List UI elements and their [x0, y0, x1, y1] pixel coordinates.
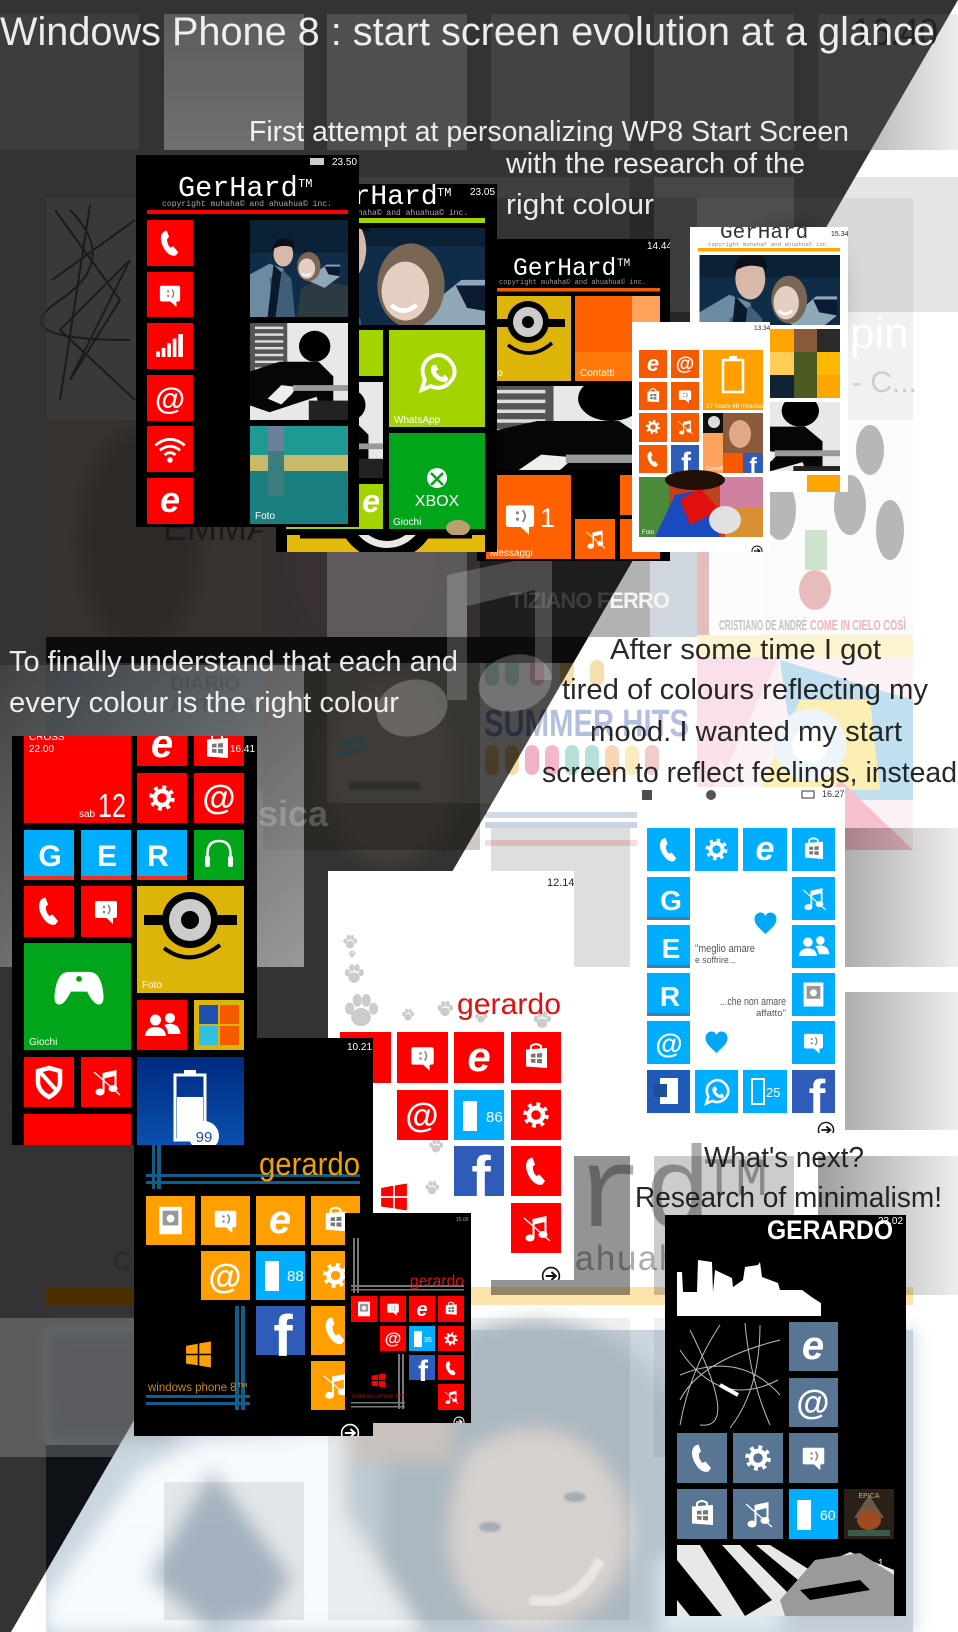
red and blue tiles: f: [471, 1145, 491, 1210]
caption: feelings: screen to reflect feelings, instead: [542, 757, 957, 789]
xbox tile: [389, 433, 485, 536]
background: faded tile content, dark side: [46, 198, 843, 1572]
GER tiles: G: [38, 840, 62, 873]
tile column: [147, 220, 193, 524]
blue tiles: R: [660, 981, 680, 1012]
slate tiles: e: [802, 1324, 824, 1368]
red tiles: e: [151, 722, 173, 766]
phone: lime and green start screen: 23.05: [470, 187, 495, 198]
guitar photo: [770, 402, 840, 471]
wordmark: GerHard: [513, 256, 616, 283]
phone: red start screen with GerHard header: 23.50: [332, 157, 357, 168]
games tile: [24, 943, 131, 1050]
orange tiles: f: [681, 447, 692, 480]
piano photo: [677, 1545, 894, 1616]
caption: every colour: every colour is the right colour: [9, 687, 399, 719]
wordmark: [708, 222, 849, 248]
caption: what's next: [635, 1142, 942, 1214]
orange and blue tiles: 88: [287, 1268, 304, 1285]
caption: feelings: mood. I wanted my start: [590, 716, 902, 748]
wordmark: GerHard: [178, 172, 298, 205]
quote: e soffrire...: [695, 955, 736, 965]
GER tiles: R: [147, 840, 169, 873]
blue tiles: 25: [766, 1085, 780, 1100]
caption: what's next: What's next?: [704, 1142, 864, 1174]
wordmark: [162, 172, 332, 209]
red and blue tiles: f: [418, 1355, 429, 1388]
phone: minimalist start screen: [665, 1215, 906, 1616]
wordmark: gerardo: [410, 1273, 464, 1290]
wordmark: copyright muhaha© and ahuahua© inc.: [499, 278, 646, 287]
minion tile: Foto: [142, 980, 162, 991]
phone: white start screen with blue tiles: [637, 787, 845, 1133]
calendar tile: 12: [98, 787, 126, 824]
album tile: [844, 1489, 894, 1539]
skyline: [677, 1260, 821, 1316]
minion tile: [486, 296, 571, 381]
orange and blue tiles: [146, 1196, 360, 1410]
phone: black start screen with orange tiles: windows phone 8™: [147, 1380, 248, 1394]
battery tile: 17 hours 48 minutes: [706, 403, 763, 410]
foto tile: Foto: [255, 511, 275, 522]
tiles: Messaggi: [490, 548, 533, 559]
caption: what's next: Research of minimalism!: [635, 1182, 942, 1214]
wordmark: TM: [617, 258, 630, 270]
calendar tile: CROSS: [29, 732, 65, 743]
blue line ornaments: [146, 1140, 360, 1410]
wordmark: gerardo: [259, 1146, 360, 1182]
quote: "meglio amare: [695, 943, 755, 955]
games tile: Giochi: [29, 1037, 57, 1048]
quote: ...che non amare: [720, 996, 786, 1008]
wordmark: copyright muhaha© and ahuahua© inc.: [708, 241, 830, 248]
phone: small white start screen with orange tiles: [632, 322, 771, 552]
calendar tile: sab: [79, 809, 96, 820]
grey line ornaments: [351, 1238, 464, 1409]
wordmark: copyright muhaha© and ahuahua© inc.: [300, 209, 468, 218]
wordmark: [499, 256, 646, 287]
blue tiles: @: [655, 1028, 683, 1059]
orange and blue tiles: f: [273, 1304, 293, 1369]
red and blue tiles: @: [385, 1329, 401, 1348]
slate tiles: 60: [820, 1507, 836, 1523]
faint clock behind title: 16.40: [852, 12, 938, 54]
GER tiles: [24, 830, 244, 880]
light trails photo: [677, 1323, 782, 1429]
guitar photo: [497, 386, 632, 470]
tiles: 1: [540, 503, 555, 533]
red and blue tiles: [340, 1032, 561, 1253]
phone: black start screen with orange tiles: [134, 1038, 373, 1436]
windows logo: [381, 1184, 407, 1210]
battery tile: [703, 350, 763, 410]
caption: first attempt: right colour: [506, 189, 654, 221]
caption: every colour: [9, 646, 458, 719]
minion tile: [137, 886, 244, 993]
red and blue tiles: [351, 1296, 464, 1410]
caption: first attempt: with the research of the: [505, 148, 805, 180]
slate tiles: [677, 1322, 838, 1539]
red and blue tiles: 35: [424, 1337, 432, 1344]
GER tiles: E: [97, 840, 117, 873]
quote: [695, 943, 786, 1018]
orange and blue tiles: @: [208, 1258, 242, 1296]
phone: tiny black start screen with red tiles: [345, 1213, 471, 1423]
blue tiles: f: [809, 1070, 826, 1126]
phone: multicolour start screen: [12, 722, 257, 1146]
windows logo: [372, 1373, 385, 1388]
battery tile: 99: [196, 1129, 212, 1146]
whatsapp tile: WhatsApp: [394, 415, 441, 426]
wordmark: gerardo: [457, 988, 561, 1021]
title: Windows Phone 8 : start screen evolution at a glance: [0, 10, 935, 54]
phone: minimalist start screen: 23.02: [878, 1216, 903, 1227]
phone: lime and green start screen: e: [362, 483, 380, 519]
hearts: [706, 912, 776, 1053]
orange tiles: @: [676, 354, 694, 375]
wordmark: copyright muhaha© and ahuahua© inc.: [162, 200, 332, 209]
caption: feelings: After some time I got: [610, 634, 881, 666]
contacts tile: Contatti: [580, 368, 614, 379]
battery tile: [137, 1057, 244, 1151]
foto tile: [250, 426, 348, 524]
phone: white start screen with red tiles: 12.14: [547, 877, 575, 889]
phone: red start screen with GerHard header: [136, 155, 359, 527]
blue tiles: E: [662, 933, 680, 964]
orange and blue tiles: e: [269, 1198, 291, 1242]
tile column: @: [155, 381, 185, 416]
wordmark: [300, 182, 468, 218]
caption: every colour: To finally understand that each and: [9, 646, 458, 678]
phone: multicolour start screen: 16.41: [230, 744, 255, 755]
red tiles: @: [202, 779, 236, 817]
red and blue tiles: e: [416, 1299, 428, 1321]
phone: small white start screen with orange tiles: 13.34: [754, 325, 771, 332]
whatsapp tile: [389, 330, 485, 427]
mario photo tile: [639, 470, 763, 537]
contacts mosaic: Contatti: [706, 466, 723, 472]
windows logo: [186, 1342, 211, 1367]
wordmark: GerHard: [320, 182, 438, 213]
phone: tiny black start screen with red tiles: windows phone 8™: [351, 1393, 405, 1400]
tile column: e: [160, 479, 180, 520]
album tile: EPICA: [858, 1493, 880, 1500]
status bar: 16.27: [822, 789, 845, 799]
contacts mosaic: [703, 413, 763, 478]
red and blue tiles: 86: [486, 1109, 503, 1126]
wordmark: GERARDO: [767, 1215, 893, 1245]
calendar tile: [24, 732, 131, 824]
wordmark: 15.34: [831, 231, 849, 238]
tiles: [486, 475, 660, 559]
phone: orange start screen: [477, 239, 672, 561]
minion tile: oto: [489, 368, 503, 379]
status bar: [642, 789, 845, 800]
guitar photo: [250, 323, 348, 420]
phone: black start screen with orange tiles: 10.21: [347, 1042, 372, 1053]
quote: affatto": [756, 1008, 786, 1018]
caption: first attempt: First attempt at personalizing WP8 Start Screen: [249, 116, 849, 148]
wordmark: GerHard: [720, 222, 808, 245]
blue tiles: e: [756, 830, 774, 868]
paw prints: [343, 935, 551, 1233]
caption: first attempt: [249, 116, 849, 221]
background tiles on dark side: sica: [258, 793, 329, 834]
caption: feelings: [542, 634, 957, 789]
contacts mosaic: [760, 329, 840, 398]
red and blue tiles: @: [405, 1097, 439, 1135]
blue tiles: [647, 828, 835, 1126]
piano photo: 1: [878, 1558, 884, 1569]
minion strip: [287, 535, 485, 552]
people and mixed tiles: [137, 1000, 244, 1050]
xbox tile: Giochi: [393, 517, 421, 528]
slate tiles: @: [796, 1384, 830, 1422]
phone: tiny black start screen with red tiles: 15.00: [456, 1217, 469, 1223]
caption: feelings: tired of colours reflecting my: [562, 674, 928, 706]
calendar tile: 22.00: [29, 744, 54, 755]
contacts mosaic: f: [749, 453, 757, 478]
blue tiles: G: [660, 885, 682, 916]
red tiles: [24, 722, 244, 937]
phone: orange start screen: 14.44: [647, 241, 672, 252]
guitar photo: [359, 382, 383, 478]
phone: lime and green start screen: [276, 182, 497, 552]
couple photo: [250, 220, 348, 317]
wordmark: TM: [298, 177, 312, 191]
couple photo: [700, 255, 840, 325]
contacts tile: [575, 296, 660, 381]
orange tiles: [639, 350, 699, 480]
orange tiles: e: [647, 351, 659, 376]
phone: white start screen with red tiles: [328, 871, 575, 1280]
wordmark: TM: [437, 186, 451, 200]
shield and music tiles: [24, 1057, 131, 1107]
couple photo: [359, 228, 485, 325]
mario photo tile: Foto: [642, 530, 655, 536]
red and blue tiles: e: [467, 1033, 491, 1080]
xbox tile: XBOX: [415, 493, 460, 510]
phone: white start screen with orange accents: [690, 222, 849, 492]
